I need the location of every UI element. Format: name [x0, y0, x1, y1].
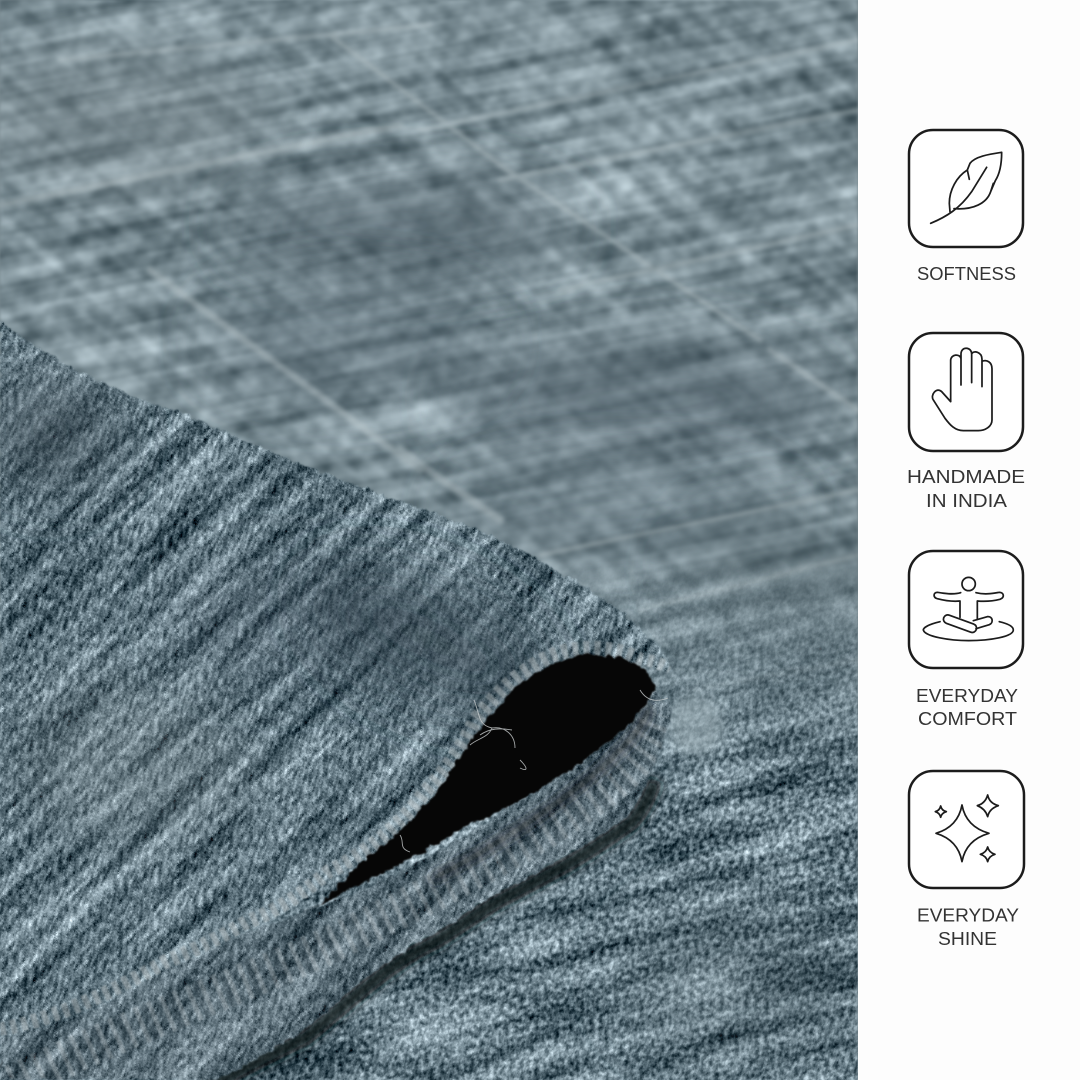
dark hollow inside the fold [0, 651, 655, 1070]
label [916, 685, 1018, 729]
label: HANDMADE [907, 466, 1025, 487]
lower layer of fold [0, 0, 858, 1080]
label: EVERYDAY [916, 685, 1018, 706]
soft shadow under fold [205, 780, 655, 1080]
label: SHINE [938, 928, 997, 949]
light woven cross lines [0, 25, 858, 690]
label: IN INDIA [926, 490, 1008, 511]
icon: sparkles [909, 771, 1024, 888]
rug floor surface [0, 0, 860, 1080]
icon: seated meditation figure [909, 551, 1023, 668]
sharp foreground pile [0, 572, 858, 1080]
label: SOFTNESS [917, 263, 1016, 284]
label: EVERYDAY [917, 904, 1019, 926]
icon: hand [909, 333, 1023, 451]
ribbed rim of flap edge [0, 648, 670, 1030]
icon: feather [909, 130, 1023, 247]
photo: blue-grey woven rug with folded corner [0, 0, 860, 1080]
panel: white feature column [858, 0, 1080, 1080]
upper folded flap [0, 0, 858, 1080]
feature: everyday comfort [909, 551, 1023, 729]
feature: softness [909, 130, 1023, 284]
label [907, 466, 1025, 511]
label: COMFORT [918, 708, 1017, 729]
feature: everyday shine [909, 771, 1024, 949]
stray fibres at fold [400, 690, 668, 852]
feature: handmade in india [907, 333, 1025, 511]
label [917, 904, 1019, 949]
